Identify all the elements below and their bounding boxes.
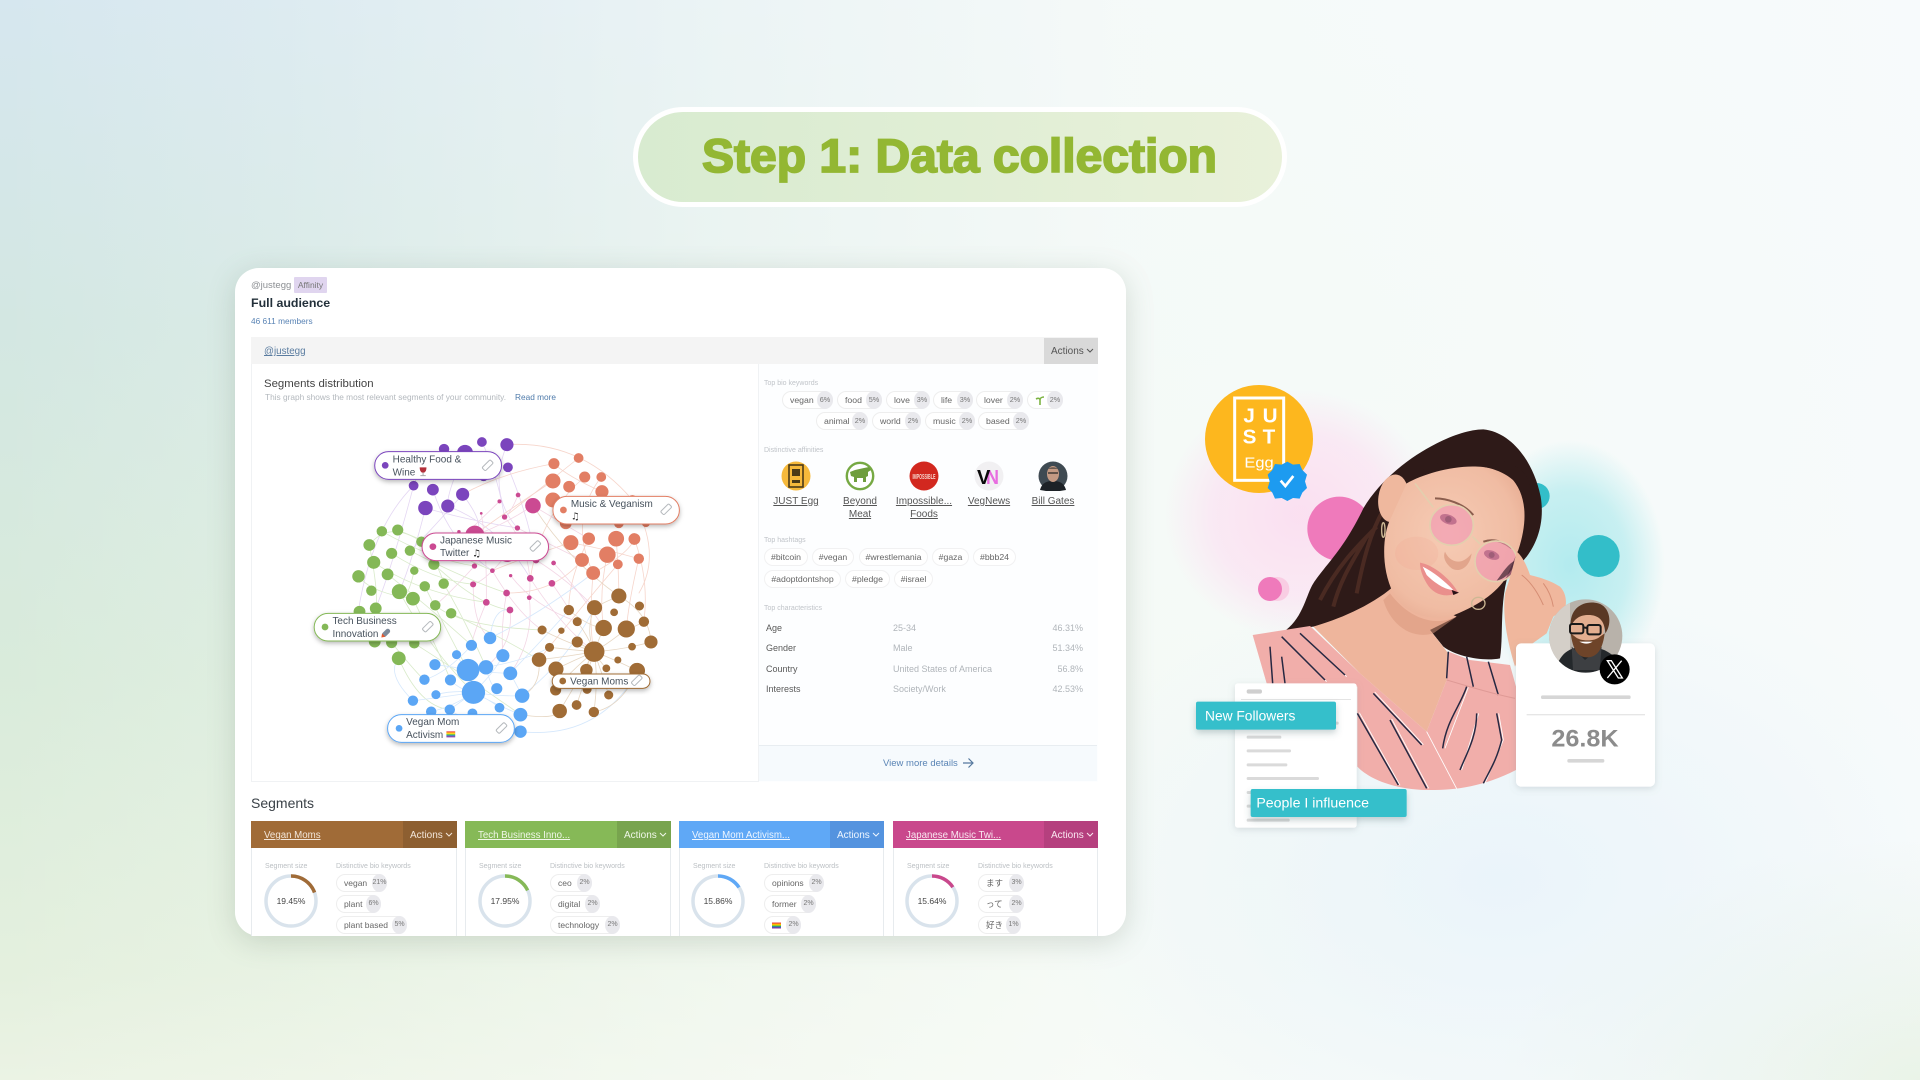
segment card: Tech Business Innovation: Distinctive bio keywords [550, 863, 625, 870]
segment card: Vegan Mom Activism: Vegan Mom Activism... [692, 830, 790, 841]
label: Tech Business Innovation: Tech Business [332, 616, 397, 627]
segment card: Vegan Moms: Distinctive bio keywords [336, 863, 411, 870]
JUST Egg brand badge: U [1263, 405, 1278, 428]
top characteristics heading: Top characteristics [764, 605, 822, 612]
card: influencer stats [1516, 643, 1655, 787]
earrings [1382, 523, 1485, 609]
text: love [894, 395, 910, 405]
segment card: Vegan Mom Activism: Distinctive bio keywords [764, 863, 839, 870]
heading: segments: Segments [251, 795, 314, 811]
affinity names [773, 496, 1074, 520]
tag: People I influence [1251, 789, 1407, 817]
graph description: This graph shows the most relevant segments of your community. [265, 392, 506, 402]
segment card: Japanese Music Twitter: 15.64% [918, 896, 947, 906]
affinity logos [782, 462, 1068, 491]
hair highlights [1320, 510, 1383, 607]
text: music [933, 416, 956, 426]
segment card: Vegan Mom Activism: 2% [803, 900, 814, 907]
top hashtags heading: Top hashtags [764, 537, 806, 544]
segment card: Vegan Mom Activism: Actions [837, 830, 870, 841]
text: Society/Work [893, 684, 946, 694]
salmon segment nodes [546, 454, 649, 579]
affinity badge: Affinity [298, 280, 323, 290]
segment card: Japanese Music Twitter: 好き [986, 920, 1003, 930]
hashtag pills [764, 548, 1016, 588]
woman portrait [1253, 429, 1566, 790]
blouse stripes navy [1270, 633, 1502, 788]
label: Japanese Music Twitter: Twitter [440, 548, 470, 559]
segment card: Tech Business Innovation: technology [558, 920, 599, 930]
read more link: Read more [515, 392, 556, 402]
segment card: Vegan Moms: 21% [372, 879, 386, 886]
text: 2% [962, 416, 972, 425]
arrow [963, 758, 974, 768]
text: 3% [917, 395, 927, 404]
account handle: @justegg [251, 280, 291, 291]
glasses [1415, 483, 1517, 582]
logo: Impossible Foods: IMPOSSIBLE [912, 472, 936, 481]
text: Bill Gates [1032, 496, 1074, 507]
segment card: Vegan Moms: plant [344, 899, 362, 909]
segment card: Japanese Music Twitter: Actions [1051, 830, 1084, 841]
text: Beyond Meat [843, 496, 877, 520]
text: based [986, 416, 1010, 426]
text: #gaza [939, 552, 962, 562]
label: Music & Veganism: Music & Veganism [571, 499, 653, 510]
segment card: Vegan Mom Activism: Segment size [693, 863, 735, 870]
text: life [941, 395, 952, 405]
card: influencer stats: 26.8K [1551, 726, 1619, 753]
text: 6% [820, 395, 830, 404]
hair [1286, 429, 1542, 659]
segment card: Vegan Moms: Segment size [265, 863, 307, 870]
text: 2% [908, 416, 918, 425]
logo: Impossible Foods [910, 462, 938, 490]
segment card: Tech Business Innovation: 2% [607, 921, 618, 928]
segment card: Tech Business Innovation: Tech Business Inno... [478, 830, 570, 841]
eyebrows [1435, 498, 1512, 548]
segment card: Tech Business Innovation: Segment size [479, 863, 521, 870]
tag: New Followers [1196, 702, 1336, 730]
label: Vegan Moms: Vegan Moms [570, 676, 628, 687]
segment card: Vegan Moms: vegan [344, 878, 367, 888]
X platform badge [1600, 654, 1630, 684]
blouse folds [1447, 680, 1515, 698]
magenta segment nodes [457, 493, 556, 613]
segment card: Vegan Moms: 6% [368, 900, 379, 907]
text: 2% [855, 416, 865, 425]
segment card: Vegan Mom Activism: opinions [772, 878, 804, 888]
text: vegan [790, 395, 814, 405]
purple segment nodes [409, 438, 513, 515]
text: 2% [1010, 395, 1020, 404]
text: Interests [766, 684, 801, 694]
segment card: Japanese Music Twitter: Segment size [907, 863, 949, 870]
text: 2% [1050, 395, 1060, 404]
JUST Egg brand badge: J [1243, 405, 1255, 428]
affinity badge [294, 277, 327, 293]
segment card: Vegan Mom Activism [679, 821, 884, 936]
text: Impossible... Foods [896, 496, 952, 520]
segment card: Tech Business Innovation: ceo [558, 878, 572, 888]
segment card: Japanese Music Twitter [893, 821, 1098, 936]
segment card: Vegan Mom Activism: former [772, 899, 797, 909]
view more details link: View more details [883, 758, 958, 769]
text: #adoptdontshop [771, 574, 834, 584]
blush [1395, 537, 1438, 570]
label: Tech Business Innovation: Innovation [332, 629, 378, 640]
smile [1420, 563, 1458, 595]
label: Music & Veganism [553, 496, 679, 524]
segment card: Japanese Music Twitter: 1% [1008, 921, 1019, 928]
JUST Egg brand badge [1205, 385, 1313, 493]
text: 5% [869, 395, 879, 404]
segment card: Japanese Music Twitter: って [986, 899, 1003, 909]
tag: New Followers: New Followers [1205, 708, 1296, 723]
segment card: Vegan Mom Activism: 2% [811, 879, 822, 886]
bio keyword pills [782, 391, 1063, 430]
logo: JUST Egg [782, 462, 810, 490]
actions button [1044, 338, 1098, 364]
brown segment nodes [532, 589, 657, 718]
green segment nodes [353, 525, 456, 665]
label: Vegan Mom Activism [388, 715, 514, 742]
top bio keywords heading: Top bio keywords [764, 380, 818, 387]
segment card: Vegan Moms: plant based [344, 920, 388, 930]
card: follower list [1235, 683, 1357, 828]
panel: audience dashboard card [235, 268, 1126, 936]
blue segment nodes [408, 632, 529, 737]
segment card: Vegan Moms: 5% [394, 921, 405, 928]
text: JUST Egg [773, 496, 819, 507]
text: world [880, 416, 901, 426]
segment card: Japanese Music Twitter: 3% [1011, 879, 1022, 886]
text: 56.8% [1057, 664, 1083, 674]
heading: full audience: Full audience [251, 296, 330, 310]
segment card: Tech Business Innovation [465, 821, 671, 936]
text: #bitcoin [771, 552, 801, 562]
segment card: Vegan Moms [251, 821, 457, 936]
decorative circles [1258, 483, 1620, 601]
segment card: Tech Business Innovation: Actions [624, 830, 657, 841]
label: Vegan Moms [552, 674, 650, 688]
panel: segments distribution frame [251, 337, 1098, 782]
hair over forehead edge [1408, 457, 1532, 551]
logo: VegNews [974, 462, 1004, 490]
segment card: Vegan Moms: Actions [410, 830, 443, 841]
hero illustration [1193, 385, 1657, 832]
JUST Egg brand badge: Egg [1244, 455, 1274, 471]
text: food [845, 395, 862, 405]
text: #israel [901, 574, 926, 584]
text: 25-34 [893, 623, 916, 633]
segment card: Tech Business Innovation: 17.95% [491, 896, 520, 906]
heading: segments distribution: Segments distribution [264, 378, 374, 390]
face [1384, 466, 1525, 618]
segment card: Tech Business Innovation: 2% [587, 900, 598, 907]
text: Country [766, 664, 798, 674]
view more details band [759, 745, 1097, 781]
text: Gender [766, 643, 796, 653]
segment card: Tech Business Innovation: digital [558, 899, 580, 909]
label: Healthy Food & Wine: Wine [393, 467, 416, 478]
JUST Egg brand badge: T [1263, 425, 1276, 448]
label: Healthy Food & Wine [375, 452, 502, 479]
segment card: Japanese Music Twitter: 2% [1011, 900, 1022, 907]
segment card: Vegan Mom Activism: 15.86% [704, 896, 733, 906]
text: Age [766, 623, 782, 633]
label: Tech Business Innovation [314, 613, 441, 641]
text: #wrestlemania [865, 552, 922, 562]
segment card: Tech Business Innovation: 2% [579, 879, 590, 886]
neck and chest [1313, 587, 1457, 732]
text: United States of America [893, 664, 992, 674]
blouse stripes white [1283, 635, 1503, 789]
segment card: Vegan Mom Activism: 2% [788, 921, 799, 928]
tag: People I influence: People I influence [1256, 796, 1369, 811]
text: lover [984, 395, 1003, 405]
segment card: Japanese Music Twitter: Japanese Music Twi... [906, 830, 1001, 841]
characteristics table [766, 623, 1083, 694]
text: 51.34% [1052, 643, 1083, 653]
graph edges [358, 442, 651, 733]
JUST Egg brand badge: S [1243, 425, 1256, 448]
label: Vegan Mom Activism: Activism [406, 730, 443, 741]
neck shadow [1383, 593, 1457, 635]
hand [1504, 552, 1566, 667]
label: Music & Veganism: ♫ [571, 511, 580, 522]
header bar [251, 337, 1098, 364]
text: #vegan [819, 552, 847, 562]
text: 2% [1016, 416, 1026, 425]
segment card: Vegan Moms: 19.45% [277, 896, 306, 906]
text: 42.53% [1052, 684, 1083, 694]
title pill [633, 107, 1287, 207]
verified check badge [1268, 462, 1307, 501]
actions button: Actions [1051, 346, 1084, 357]
text: #pledge [852, 574, 883, 584]
text: 3% [960, 395, 970, 404]
network graph [311, 437, 682, 748]
text: VegNews [968, 496, 1010, 507]
segment card: Japanese Music Twitter: ます [986, 878, 1003, 888]
text: Male [893, 643, 913, 653]
distinctive affinities heading: Distinctive affinities [764, 447, 823, 454]
member count: 46 611 members [251, 316, 313, 326]
segment card: Vegan Moms: Vegan Moms [264, 830, 321, 841]
text: 46.31% [1052, 623, 1083, 633]
eyes [1439, 512, 1458, 527]
label: Japanese Music Twitter: Japanese Music [440, 536, 512, 547]
avatar: man with glasses [1549, 599, 1622, 673]
handle link: @justegg [264, 346, 306, 357]
logo: VegNews: N [986, 467, 999, 489]
right column [758, 364, 1098, 782]
label: Japanese Music Twitter [422, 533, 549, 561]
logo: VegNews: V [977, 467, 991, 489]
nose [1444, 552, 1472, 570]
main card shadow [235, 268, 1126, 936]
label: Japanese Music Twitter: ♫ [472, 549, 481, 560]
label: Vegan Mom Activism: Vegan Mom [406, 717, 459, 728]
title pill: Step 1: Data collection [702, 129, 1217, 182]
portrait: Bill Gates [1038, 462, 1068, 491]
segment card: Japanese Music Twitter: Distinctive bio keywords [978, 863, 1053, 870]
logo: Beyond Meat [847, 463, 873, 489]
blouse [1253, 626, 1516, 790]
text: animal [824, 416, 850, 426]
label: Healthy Food & Wine: Healthy Food & [393, 454, 462, 465]
text: #bbb24 [980, 552, 1009, 562]
ear [1375, 472, 1412, 524]
finger lines [1522, 575, 1553, 607]
